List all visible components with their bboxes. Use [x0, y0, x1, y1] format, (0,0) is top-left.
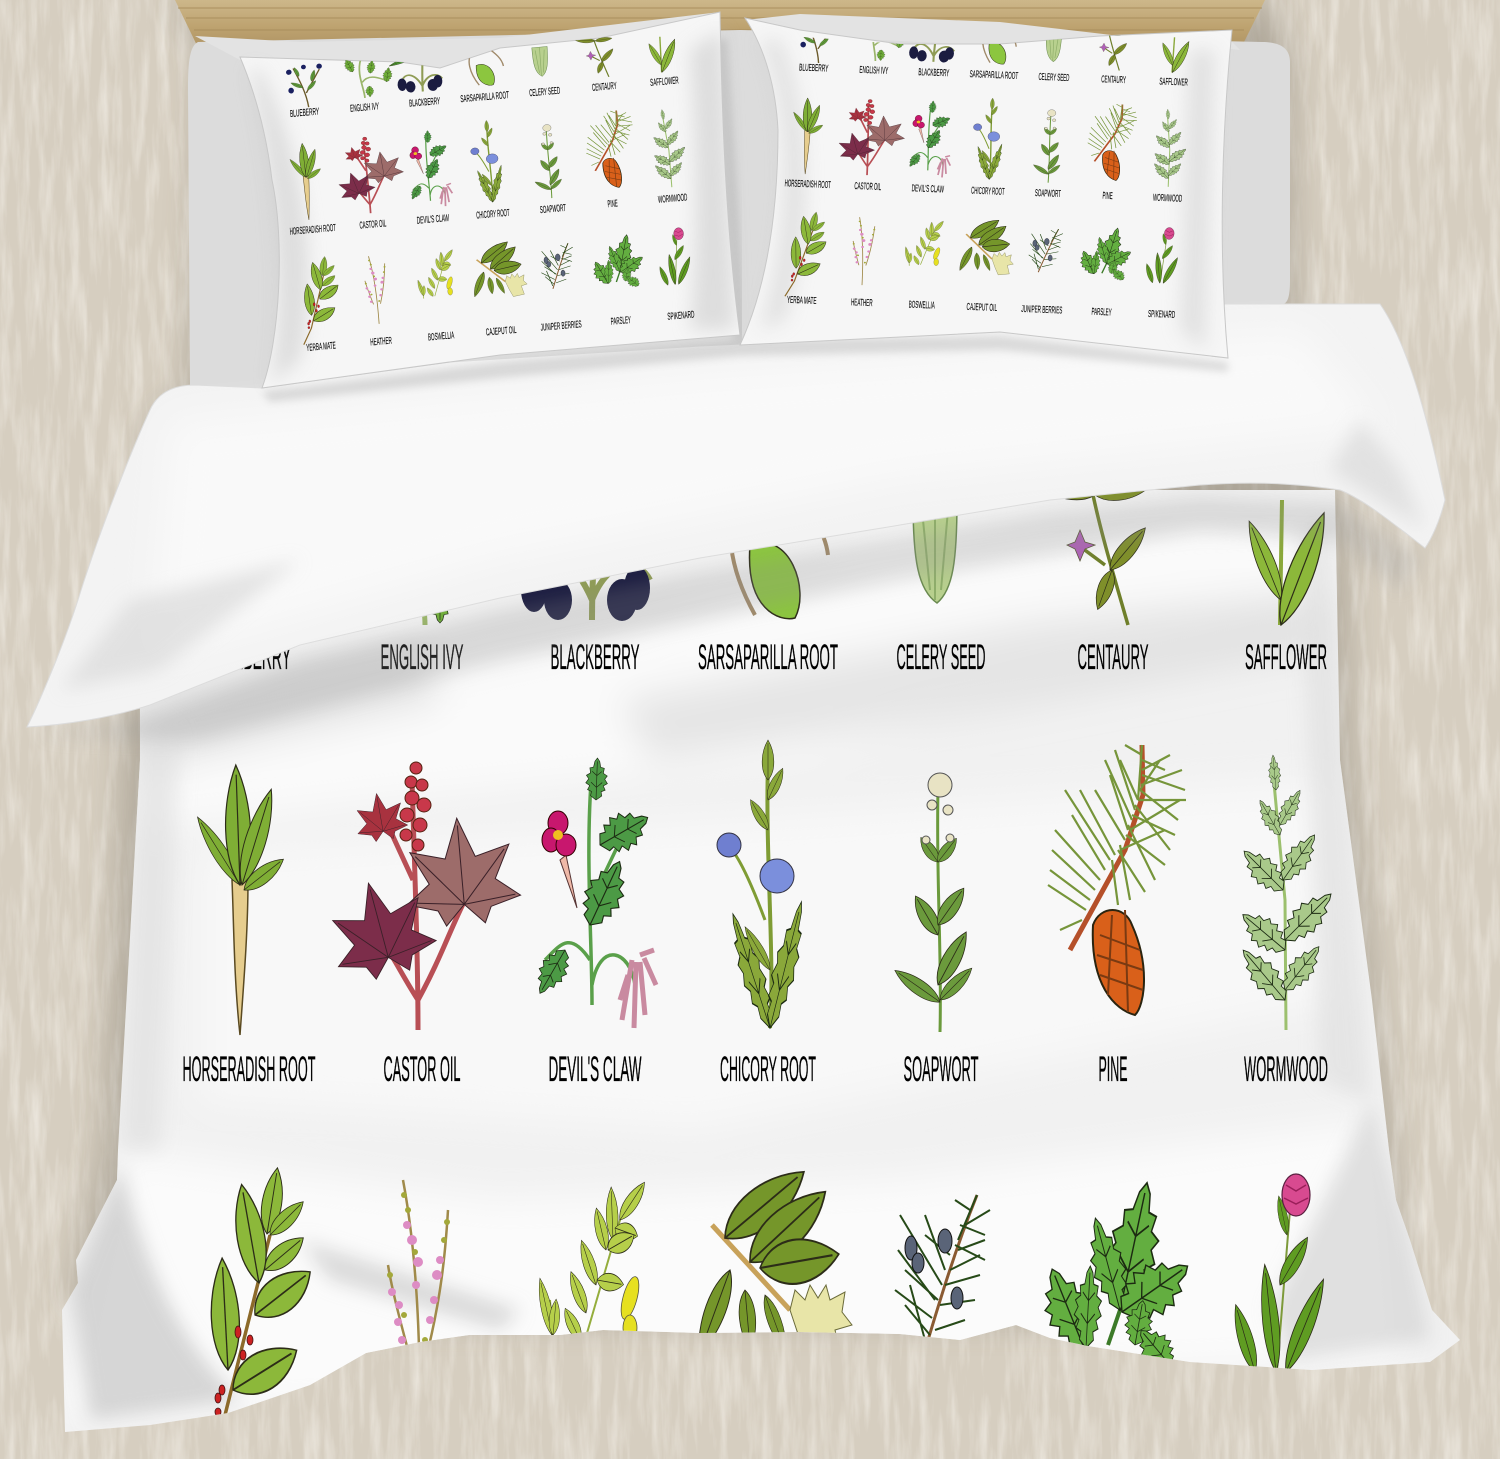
pillow flap left [195, 12, 720, 70]
pillow print left: WORMWOOD [658, 192, 688, 206]
plant labels row 2: CHICORY ROOT [720, 1050, 816, 1089]
pillow shadows on duvet [262, 336, 1228, 402]
duvet: lower printed area: SAFFLOWER [1245, 638, 1327, 677]
plant labels row 2: HORSERADISH ROOT [182, 1050, 316, 1089]
pillow print left: PARSLEY [610, 315, 632, 327]
pillow print right: DEVIL'S CLAW [911, 183, 944, 195]
duvet: lower printed area [50, 470, 1470, 1459]
pillow: left [195, 12, 740, 388]
pillow print right: CELERY SEED [1038, 72, 1070, 84]
pillow print right: SPIKENARD [1148, 309, 1175, 321]
plant labels row 1: CELERY SEED [896, 638, 986, 677]
pillow print right: SARSAPARILLA ROOT [969, 69, 1019, 82]
duvet: lower printed area: WORMWOOD [1244, 1050, 1328, 1089]
pillow print right: JUNIPER BERRIES [1021, 304, 1063, 316]
pillow print right: BLUEBERRY [799, 62, 829, 74]
pillow print left: CASTOR OIL [359, 218, 387, 231]
pillow print left: HEATHER [370, 336, 392, 348]
fold crease shading [60, 420, 1425, 690]
pillow shading left [250, 30, 735, 385]
duvet base [50, 480, 1470, 1440]
pillow: right [740, 14, 1240, 358]
duvet folds and highlights [110, 544, 1340, 1410]
pillow print right: HEATHER [851, 297, 873, 309]
plant labels row 2: PINE [1098, 1050, 1128, 1089]
pillow print left: CENTAURY [592, 81, 617, 94]
pillow print right: PINE [1102, 191, 1113, 202]
pillow print left: SAFFLOWER [650, 75, 679, 89]
pillow print left: ENGLISH IVY [350, 101, 380, 114]
pillow print left: BOSWELLIA [428, 330, 455, 343]
pillow shading right [760, 40, 1215, 350]
pillow print right: BOSWELLIA [909, 300, 935, 311]
fold highlight [150, 330, 1380, 660]
plant labels row 1 [207, 638, 1327, 677]
plant labels row 1: BLUEBERRY [207, 638, 291, 677]
pillow print left: BLUEBERRY [290, 106, 320, 120]
pillow print right: PARSLEY [1091, 307, 1112, 318]
pillow print left: CHICORY ROOT [476, 208, 510, 221]
pillow print left: JUNIPER BERRIES [540, 319, 582, 333]
pillow print left: PINE [607, 198, 618, 210]
pillow print right: SOAPWORT [1035, 188, 1061, 200]
pillow print left: YERBA MATE [306, 340, 336, 354]
pillow print right: CASTOR OIL [854, 181, 881, 193]
duvet: folded-back top [27, 304, 1445, 727]
pillow: right: SAFFLOWER [1159, 76, 1188, 88]
pillow print right: HORSERADISH ROOT [784, 178, 831, 191]
pillow print left: DEVIL'S CLAW [416, 213, 450, 226]
pillow: left: SPIKENARD [667, 309, 695, 322]
pillow print right: ENGLISH IVY [859, 65, 889, 77]
pillow print left: BLACKBERRY [409, 96, 441, 109]
pillow body right [740, 18, 1232, 358]
plant labels row 1: BLACKBERRY [550, 638, 640, 677]
pillow print right [784, 35, 1190, 318]
pillow print right: CHICORY ROOT [971, 186, 1005, 198]
pillow print right: YERBA MATE [787, 295, 817, 307]
pillow print left: CAJEPUT OIL [486, 325, 517, 338]
pillow print left: SARSAPARILLA ROOT [460, 90, 509, 105]
headboard [175, 0, 1265, 62]
pillow flap right [745, 14, 1240, 50]
pillow print right: CAJEPUT OIL [966, 302, 997, 314]
plant labels row 1: SARSAPARILLA ROOT [698, 638, 838, 677]
plant labels row 2: SOAPWORT [904, 1050, 978, 1089]
fold shadow [35, 497, 1420, 740]
plant labels row 1: ENGLISH IVY [380, 638, 464, 677]
fitted sheet [188, 30, 1290, 398]
pillow print left: HORSERADISH ROOT [289, 223, 336, 237]
printed plants on duvet [191, 470, 1341, 1459]
plant labels row 2: DEVIL'S CLAW [548, 1050, 642, 1089]
pillow print right: CENTAURY [1101, 74, 1126, 86]
pillow body left [240, 12, 740, 388]
pillow print right: WORMWOOD [1153, 193, 1182, 204]
plant labels row 2: CASTOR OIL [384, 1050, 460, 1089]
pillow print right: BLACKBERRY [918, 67, 950, 79]
pillow print left: CELERY SEED [529, 86, 561, 99]
pillow print left: SOAPWORT [540, 203, 566, 216]
plant labels row 2 [183, 1056, 1328, 1082]
pillow print left [278, 26, 701, 354]
plant labels row 1: CENTAURY [1078, 638, 1148, 677]
